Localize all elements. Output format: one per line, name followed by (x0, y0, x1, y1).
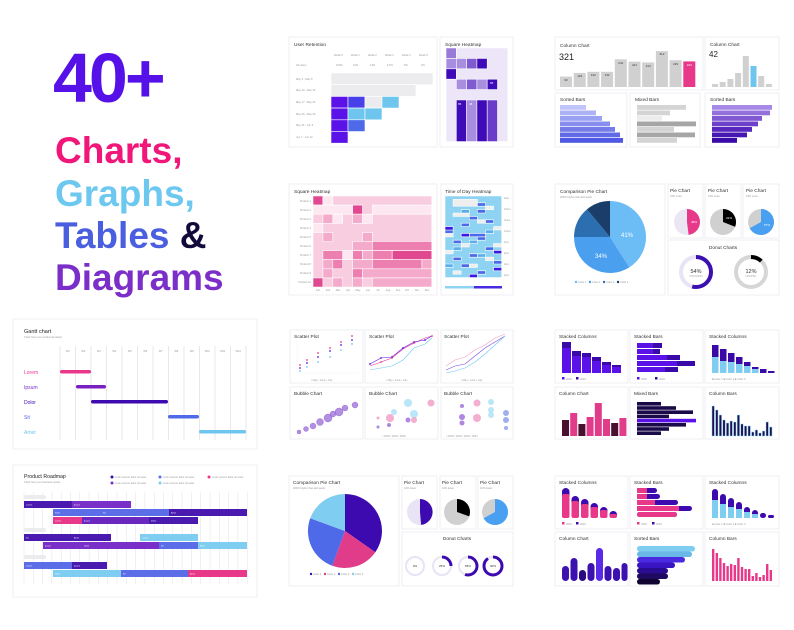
panel: bubble chart columns: • 2018 • 2019 • 2020 • 2021 (446, 434, 478, 438)
panel: product roadmap: Lorem (26, 564, 32, 568)
panel: scatter plot smooth: Scatter Plot (444, 334, 469, 340)
panel: column bars pink: Column Bars (709, 536, 737, 542)
panel: product roadmap: Lorem ipsum dolor sit amet (115, 475, 147, 479)
panel: stacked bars purple: Stacked Bars (634, 334, 663, 340)
panel: gantt chart (13, 319, 257, 449)
panel: comparison pie blue: Color 4 (620, 280, 629, 284)
panel: user retention: Week 3 (385, 53, 394, 57)
title (53, 39, 224, 298)
panel: user retention (289, 37, 437, 147)
panel: gantt chart: W10 (205, 349, 211, 353)
panel: bubble chart diagonal: Bubble Chart (294, 391, 323, 397)
panel: gantt chart: Ipsum (24, 385, 38, 391)
panel: stacked bars rounded pink: 2019 (656, 522, 662, 526)
panel: product roadmap: Lorem ipsum dolor sit amet (115, 481, 147, 485)
panel: comparison pie purple: Color 1 (313, 572, 322, 576)
panel: stacked bars purple: 2019 (659, 377, 665, 381)
panel: pie chart pink (668, 184, 703, 238)
panel: stacked columns rounded blue (705, 476, 779, 529)
panel: product roadmap: Sit (103, 512, 106, 514)
panel: product roadmap: Amet (171, 512, 176, 514)
panel: donut charts top (668, 240, 779, 295)
panel: stacked columns rounded pink: 2019 (580, 522, 586, 526)
panel: product roadmap: Sit (123, 572, 126, 576)
panel: scatter plot smooth (441, 330, 513, 383)
panel: gantt chart: W5 (128, 349, 132, 353)
panel: bubble chart scattered: • 2018 • 2019 • 2020 (382, 434, 406, 438)
panel: scatter plot lines: Scatter Plot (369, 334, 394, 340)
panel: sorted bars blue: Sorted Bars (560, 97, 586, 103)
panel: pie chart purple (402, 476, 437, 529)
panel: square heatmap pink: Product 8 (300, 262, 312, 266)
panel: square heatmap pink: Jun (366, 288, 371, 292)
panel: comparison pie blue: Color 1 (578, 280, 587, 284)
panel: square heatmap pink: Feb (326, 288, 331, 292)
panel: comparison pie purple: Comparison Pie Chart (293, 480, 341, 486)
panel: user retention: Week 5 (419, 53, 428, 57)
panel: column chart 321: 132 (591, 73, 596, 77)
panel: square heatmap pink: Jul (376, 288, 380, 292)
panel: pie chart blue bottom: 10% lower (480, 486, 492, 490)
panel: product roadmap: Amet (200, 544, 205, 548)
panel: bubble chart columns: Bubble Chart (444, 391, 473, 397)
panel: square heatmap pink: Oct (405, 288, 409, 292)
panel: square heatmap purple (440, 37, 513, 147)
panel: user retention: May 10 - May 16 (296, 88, 316, 92)
panel: sorted bars rounded: Sorted Bars (634, 536, 660, 542)
panel: comparison pie purple: 300% higher than last week (293, 486, 326, 490)
panel: user retention: User Retention (294, 42, 326, 48)
panel: product roadmap: Lorem (55, 520, 61, 522)
panel: column chart pink (555, 387, 628, 439)
panel: stacked columns purple (555, 330, 628, 383)
panel: comparison pie blue: Color 3 (606, 280, 615, 284)
panel: square heatmap pink: Product 6 (300, 244, 312, 248)
panel: product roadmap: Ipsum (45, 546, 51, 548)
panel: pie chart black (705, 184, 741, 238)
panel: comparison pie blue (555, 184, 665, 295)
panel: product roadmap: Lorem (26, 504, 32, 506)
panel: pie chart black: 31% (726, 216, 732, 220)
panel: column chart 321: 214 (646, 64, 651, 68)
panel: gantt chart: Amet (24, 430, 36, 436)
panel: stacked columns purple: Stacked Columns (559, 334, 597, 340)
panel: stacked columns blue (705, 330, 779, 383)
panel: gantt chart: Lorem (24, 370, 38, 376)
panel: comparison pie blue: Color 2 (592, 280, 601, 284)
panel: pie chart pink: 19% more (670, 194, 682, 198)
panel: time of day heatmap: 12pm (504, 229, 510, 233)
panel: scatter plot dots (290, 330, 363, 383)
panel: product roadmap: Lorem ipsum dolor sit amet (163, 481, 195, 485)
panel: comparison pie purple (289, 476, 399, 586)
panel: square heatmap pink: Product 5 (300, 235, 312, 239)
panel: square heatmap pink: May (356, 288, 361, 292)
panel: scatter plot smooth: • May • June • July (461, 378, 483, 382)
panel: product roadmap: Product Roadmap (24, 474, 66, 480)
panel: comparison pie purple: Color 2 (327, 572, 336, 576)
panel: user retention: 100% (336, 63, 343, 67)
panel: product roadmap: Ipsum (74, 566, 80, 568)
panel: stacked columns blue: Stacked Columns (709, 334, 747, 340)
panel: gantt chart: Gantt chart (24, 329, 52, 335)
panel: comparison pie blue: Comparison Pie Chart (560, 189, 608, 195)
panel: square heatmap pink: Product 7 (300, 253, 312, 257)
panel: bubble chart scattered: Bubble Chart (369, 391, 398, 397)
panel: pie chart purple: 10% lower (404, 486, 416, 490)
panel: pie chart black: 19% more (708, 194, 720, 198)
panel: column chart rounded purple: Column Chart (559, 536, 589, 542)
panel: comparison pie blue: 34% (595, 254, 608, 260)
panel: user retention: 6.6% (387, 63, 394, 67)
panel: donut charts bottom: 0% (413, 564, 417, 568)
panel: square heatmap pink: Square Heatmap (294, 189, 331, 195)
panel: column chart 321: 321 (559, 52, 574, 62)
panel: square heatmap purple: 65 (490, 81, 494, 85)
panel: user retention: Week 4 (402, 53, 411, 57)
panel: time of day heatmap: 10am (504, 207, 510, 211)
panel: user retention: Jun 7 - Jun 13 (296, 135, 313, 139)
panel: sorted bars purple (705, 93, 779, 147)
panel: bubble chart columns (441, 387, 513, 439)
panel: user retention: 5% (404, 63, 408, 67)
panel: gantt chart: W6 (143, 349, 148, 353)
panel: gantt chart: Dolor (24, 400, 36, 406)
panel: user retention: 3% (421, 63, 425, 67)
panel: square heatmap pink: Apr (346, 288, 350, 292)
panel: column chart 321: 241 (618, 61, 624, 65)
panel: column chart 321: 221 (632, 63, 637, 67)
panel: square heatmap pink: Sep (396, 288, 401, 292)
panel: mixed bars dark: Mixed Bars (634, 391, 659, 397)
panel: stacked bars rounded pink: Stacked Bars (634, 480, 663, 486)
panel: pie chart blue bottom (478, 476, 513, 529)
panel: comparison pie blue: 41% (621, 233, 634, 239)
panel: donut charts top: 12% (745, 269, 757, 275)
panel: stacked columns rounded pink: Stacked Columns (559, 480, 597, 486)
panel: product roadmap: Lorem (142, 536, 148, 540)
panel: donut charts bottom: 90% (490, 564, 496, 568)
panel: product roadmap (13, 465, 257, 597)
panel: square heatmap pink: Product 10 (298, 280, 312, 284)
panel: scatter plot lines (365, 330, 438, 383)
panel: stacked columns rounded blue: ■ Color 1 ■ Color 2 ■ Color 3 (712, 522, 746, 526)
panel: stacked columns rounded blue: Stacked Columns (709, 480, 747, 486)
panel: square heatmap pink: Product 2 (300, 208, 312, 212)
panel: product roadmap: Sit (161, 544, 164, 548)
panel: column chart 42: Column Chart (710, 42, 740, 48)
panel: column chart 321: 223 (687, 63, 692, 67)
panel: stacked columns blue: ■ Color 1 ■ Color 2 ■ Color 3 (712, 377, 746, 381)
panel: user retention: Week 1 (351, 53, 360, 57)
panel: square heatmap pink: Product 3 (300, 217, 312, 221)
panel: square heatmap pink: Aug (386, 288, 391, 292)
panel: pie chart blue: 19% more (746, 194, 758, 198)
panel: mixed bars gray: Mixed Bars (635, 97, 660, 103)
panel: column chart 321: 233 (673, 62, 678, 66)
panel: stacked columns purple: 2019 (580, 377, 586, 381)
panel: donut charts top: PROGRESS (689, 276, 703, 278)
panel: column chart 321: 132 (605, 73, 610, 77)
panel: column chart rounded purple (555, 532, 628, 586)
panel: bubble chart scattered (365, 387, 438, 439)
panel: mixed bars dark (630, 387, 703, 439)
panel: comparison pie purple: Color 3 (341, 572, 350, 576)
panel: column bars dark (705, 387, 779, 439)
panel: gantt chart: W9 (190, 349, 194, 353)
panel: product roadmap: Ipsum (84, 520, 90, 522)
panel: product roadmap: Amet (74, 536, 79, 540)
panel: product roadmap: Chart how your business grows (24, 480, 61, 484)
panel: square heatmap pink (289, 184, 437, 295)
panel: user retention: May 3 - May 9 (296, 77, 313, 81)
panel: gantt chart: W7 (159, 349, 163, 353)
panel: gantt chart: W2 (81, 349, 86, 353)
panel: pie chart blue (743, 184, 779, 238)
panel: product roadmap: Dolor (151, 520, 156, 522)
panel: product roadmap: Amet (190, 572, 195, 576)
panel: product roadmap: Lorem ipsum dolor sit amet (212, 475, 244, 479)
panel: donut charts top: FINISHED (746, 276, 757, 278)
panel: comparison pie blue: 300% higher than last week (560, 195, 593, 199)
panel: square heatmap purple: Square Heatmap (445, 42, 482, 48)
panel: mixed bars gray (630, 93, 700, 147)
panel: scatter plot dots: • May • June • July (311, 378, 333, 382)
panel: stacked columns rounded pink: 2020 (566, 522, 572, 526)
title: 40+ (53, 39, 164, 117)
panel: pie chart blue: Pie Chart (746, 188, 767, 194)
panel: column chart 321: 90 (564, 78, 568, 82)
panel: column chart pink: Column Chart (559, 391, 589, 397)
panel: pie chart black bottom (440, 476, 476, 529)
panel: time of day heatmap: 2pm (504, 251, 509, 255)
panel: scatter plot lines: • May • June • July (386, 378, 408, 382)
title: Graphs, (55, 173, 195, 214)
panel: time of day heatmap (441, 184, 513, 295)
panel: time of day heatmap: 9am (504, 196, 509, 200)
panel: time of day heatmap: Time of Day Heatmap (445, 189, 492, 195)
panel: square heatmap pink: Product 9 (300, 271, 312, 275)
panel: donut charts bottom: 55% (465, 564, 471, 568)
panel: scatter plot dots: Scatter Plot (294, 334, 319, 340)
panel: sorted bars rounded (630, 532, 703, 586)
panel: gantt chart: Chart how your product develops (24, 335, 63, 339)
title: Diagrams (55, 257, 224, 298)
panel: column chart 42 (705, 37, 779, 90)
panel: user retention: May 31 - Jun 6 (296, 123, 314, 127)
title: Tables & (55, 215, 206, 256)
panel: gantt chart: W1 (66, 349, 70, 353)
panel: square heatmap pink: Dec (425, 288, 430, 292)
panel: user retention: May 17 - May 24 (296, 100, 316, 104)
panel: donut charts bottom: 25% (439, 564, 445, 568)
panel: stacked columns rounded pink (555, 476, 628, 529)
panel: pie chart pink: Pie Chart (670, 188, 691, 194)
panel: column chart 42: 42 (709, 50, 718, 59)
panel: time of day heatmap: 11am (504, 218, 510, 222)
panel: column bars dark: Column Bars (709, 391, 737, 397)
panel: pie chart black bottom: 10% lower (442, 486, 454, 490)
panel: user retention: 41% (353, 63, 359, 67)
panel: square heatmap purple: 48 (469, 102, 473, 106)
panel: sorted bars purple: Sorted Bars (710, 97, 736, 103)
panel: time of day heatmap: 1pm (504, 240, 509, 244)
panel: bubble chart diagonal (290, 387, 363, 439)
panel: donut charts bottom (402, 532, 513, 586)
panel: gantt chart: W11 (220, 349, 226, 353)
panel: column chart 321: 123 (577, 74, 583, 78)
title: Charts, (55, 130, 182, 171)
panel: user retention: Week 0 (334, 53, 343, 57)
panel: time of day heatmap: 3pm (504, 262, 509, 266)
panel: column chart 321: 312 (659, 52, 665, 56)
panel: square heatmap pink: Product 4 (300, 226, 312, 230)
panel: gantt chart: Sit (24, 415, 30, 421)
panel: column chart 321 (555, 37, 703, 90)
panel: donut charts bottom: Donut Charts (443, 536, 472, 542)
panel: product roadmap: Lorem ipsum dolor sit amet (163, 475, 195, 479)
panel: sorted bars blue (555, 93, 627, 147)
panel: user retention: Week 2 (368, 53, 377, 57)
panel: time of day heatmap: 4pm (504, 273, 509, 277)
panel: square heatmap pink: Mar (336, 288, 340, 292)
panel: gantt chart: W8 (174, 349, 179, 353)
panel: comparison pie purple: Color 4 (355, 572, 364, 576)
panel: stacked bars rounded pink (630, 476, 703, 529)
panel: stacked bars rounded pink: 2020 (641, 522, 647, 526)
panel: stacked columns purple: 2020 (566, 377, 572, 381)
panel: gantt chart: W3 (97, 349, 101, 353)
panel: gantt chart: W12 (236, 349, 242, 353)
panel: stacked bars purple: 2020 (641, 377, 647, 381)
panel: column chart 321: Column Chart (560, 43, 590, 49)
panel: product roadmap: Dolor (84, 544, 89, 548)
panel: donut charts top: Donut Charts (709, 245, 738, 251)
panel: product roadmap: Dolor (55, 572, 60, 576)
panel: square heatmap pink: Jan (316, 288, 321, 292)
panel: user retention: May 25 - May 30 (296, 112, 316, 116)
panel: pie chart blue: 67% (764, 223, 770, 227)
panel: pie chart black: Pie Chart (708, 188, 729, 194)
panel: square heatmap pink: Product 1 (300, 199, 312, 203)
panel: pie chart blue bottom: Pie Chart (480, 480, 501, 486)
panel: pie chart pink: 48% (691, 220, 697, 224)
panel: gantt chart: W4 (112, 349, 117, 353)
panel: pie chart purple: Pie Chart (404, 480, 425, 486)
panel: pie chart black bottom: Pie Chart (442, 480, 463, 486)
panel: product roadmap: Ipsum (74, 504, 80, 506)
panel: square heatmap pink: Nov (415, 288, 420, 292)
panel: column bars pink (705, 532, 779, 586)
panel: product roadmap: Sit (26, 536, 29, 540)
panel: user retention: 14% (370, 63, 376, 67)
panel: user retention: All Users (296, 63, 307, 67)
panel: donut charts top: 54% (690, 269, 702, 275)
panel: square heatmap purple: 65 (458, 102, 462, 106)
panel: stacked bars purple (630, 330, 703, 383)
panel: product roadmap: Dolor (55, 512, 60, 514)
